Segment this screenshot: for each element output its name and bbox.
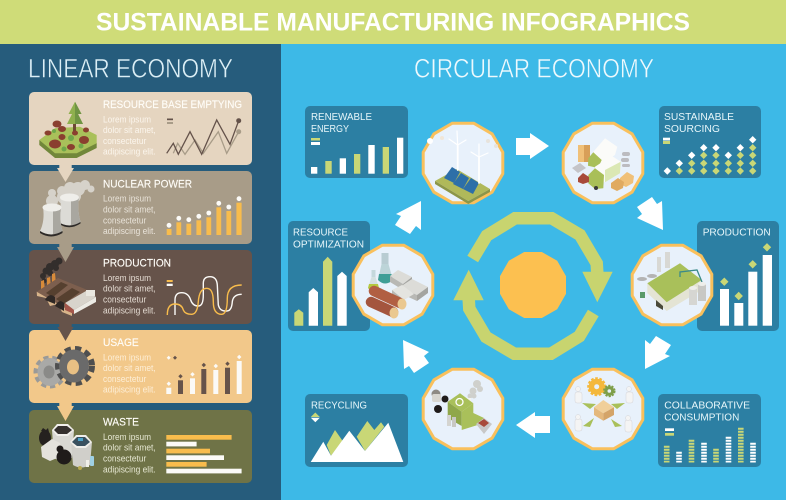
arrow bar chart (294, 257, 347, 326)
text block: consectetur (103, 454, 146, 464)
panel heading: SUSTAINABLE (664, 111, 734, 123)
arrow: nuclear to production (57, 244, 74, 262)
circle: renewable energy illustration (423, 123, 503, 204)
card: usage (29, 330, 252, 403)
heading: linear economy: LINEAR ECONOMY (28, 53, 233, 83)
diamond chart (663, 136, 756, 175)
circular arrows ring (453, 218, 613, 354)
text block (103, 273, 156, 315)
panel heading: ENERGY (311, 123, 349, 135)
text block (103, 114, 156, 157)
arrow: production to consumption (645, 336, 671, 369)
circle: collaborative consumption illustration (563, 369, 643, 449)
card heading: NUCLEAR POWER (103, 178, 192, 190)
card: resource base emptying (29, 92, 252, 165)
line chart (167, 118, 241, 154)
text block: dolor sit amet, (103, 204, 156, 214)
wave line chart (167, 277, 242, 315)
card heading: WASTE (103, 417, 139, 429)
card: production (29, 250, 252, 324)
equalizer chart (665, 428, 753, 462)
panel heading (293, 227, 364, 250)
panel heading: RECYCLING (311, 399, 367, 411)
circle: production illustration (632, 245, 712, 325)
text block: adipiscing elit. (103, 147, 156, 157)
panel heading: OPTIMIZATION (293, 238, 364, 250)
icon: trash bins (39, 424, 94, 470)
text block (103, 194, 156, 236)
arrow: usage to waste (57, 403, 74, 421)
text block: adipiscing elit. (103, 305, 156, 315)
panel heading: SOURCING (664, 123, 720, 135)
panel heading: RENEWABLE (311, 111, 372, 123)
card heading: PRODUCTION (103, 258, 171, 270)
panel: production (697, 221, 779, 331)
card: nuclear power (29, 171, 252, 244)
title banner (0, 0, 786, 44)
text block: Lorem ipsum (103, 273, 151, 283)
text block: dolor sit amet, (103, 363, 156, 373)
panel heading (664, 399, 750, 424)
arrow: recycling to optimization (403, 340, 429, 373)
panel: renewable energy (305, 106, 408, 178)
panel: recycling (305, 394, 408, 467)
horizontal bar chart (166, 435, 242, 473)
text block: consectetur (103, 295, 146, 305)
text block: dolor sit amet, (103, 443, 156, 453)
panel heading: RESOURCE (293, 227, 348, 239)
panel: resource optimization (288, 221, 370, 331)
bar chart (167, 196, 242, 235)
heading: circular economy: CIRCULAR ECONOMY (414, 53, 654, 83)
arrow: resource to nuclear (57, 165, 74, 182)
arrow: consumption to recycling (516, 412, 550, 438)
icon: smoking factory (37, 258, 96, 316)
text block: adipiscing elit. (103, 226, 156, 236)
card heading: RESOURCE BASE EMPTYING (103, 99, 242, 111)
arrow: production to usage (58, 324, 74, 341)
diamond bar chart (720, 243, 772, 326)
text block: adipiscing elit. (103, 464, 156, 474)
panel heading (311, 111, 372, 135)
circle: recycling illustration (423, 369, 503, 449)
text block: Lorem ipsum (103, 432, 151, 442)
arrow: optimization to energy (395, 201, 421, 234)
panel: sustainable sourcing (659, 106, 761, 178)
bar chart (311, 138, 403, 174)
text block: dolor sit amet, (103, 284, 156, 294)
text block: Lorem ipsum (103, 114, 151, 124)
text block: Lorem ipsum (103, 194, 151, 204)
icon: forest stumps platform (39, 102, 97, 158)
arrow: energy to sourcing (516, 133, 549, 159)
panel: linear economy background (0, 44, 281, 500)
arrow: sourcing to production (637, 197, 663, 230)
text block: consectetur (103, 374, 146, 384)
text block (103, 352, 156, 395)
panel heading: PRODUCTION (703, 227, 771, 239)
mountain chart (311, 412, 403, 462)
icon: gears (36, 349, 92, 386)
bar chart (166, 355, 242, 394)
panel heading: CONSUMPTION (664, 412, 739, 424)
panel heading: COLLABORATIVE (664, 399, 750, 411)
card heading: USAGE (103, 337, 139, 349)
text block: Lorem ipsum (103, 352, 151, 362)
text block: dolor sit amet, (103, 125, 156, 135)
card: waste (29, 410, 252, 483)
ring upper arrow (473, 218, 613, 302)
icon: cooling towers (40, 180, 94, 236)
panel heading (664, 111, 734, 135)
title: SUSTAINABLE MANUFACTURING INFOGRAPHICS (96, 9, 690, 37)
circle: resource optimization illustration (353, 245, 433, 325)
ring lower arrow (453, 270, 593, 354)
circle: sustainable sourcing illustration (563, 123, 643, 203)
text block: consectetur (103, 216, 146, 226)
text block (103, 432, 156, 474)
center octagon (500, 252, 566, 318)
text block: consectetur (103, 136, 146, 146)
panel: collaborative consumption (658, 394, 761, 467)
text block: adipiscing elit. (103, 385, 156, 395)
